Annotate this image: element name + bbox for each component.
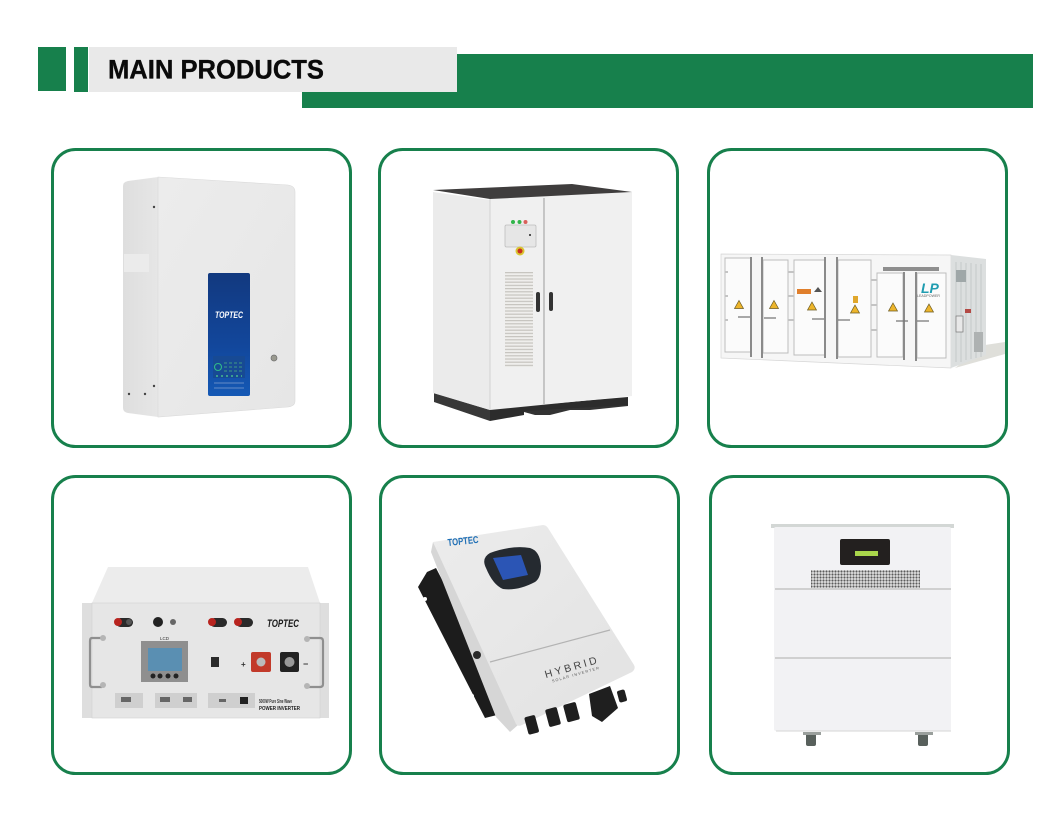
- panel: outdoor cabinet: [380, 150, 678, 446]
- screen: [484, 547, 541, 589]
- casters: [803, 732, 933, 746]
- header band: green: [302, 54, 1033, 108]
- card frame: [52, 476, 350, 774]
- logo: LP: [921, 280, 940, 296]
- logo: TOPTEC: [215, 310, 243, 321]
- LCD module: [141, 636, 188, 682]
- panel: hybrid inverter: [380, 476, 678, 774]
- control box: [505, 220, 536, 256]
- model label: SOLAR INVERTER: [551, 666, 601, 684]
- panel: wall-mounted battery: [52, 150, 350, 446]
- logo: LEADPOWER: [917, 294, 940, 298]
- battery display panel: [208, 273, 250, 396]
- card frame: [708, 150, 1006, 446]
- mounting bracket: [418, 568, 510, 718]
- logo: TOPTEC: [447, 535, 479, 549]
- header accent: narrow green bar: [74, 47, 88, 92]
- vent mesh: [811, 570, 920, 588]
- header banner: [38, 47, 1033, 108]
- header accent: large green square: [38, 47, 66, 91]
- LCD module: LCD: [160, 636, 170, 641]
- card frame: [52, 150, 350, 446]
- logo: TOPTEC: [267, 618, 300, 630]
- card frame: [380, 476, 678, 774]
- panel: container storage: [708, 150, 1006, 446]
- product: storage container: [721, 254, 1005, 368]
- door handles: [536, 292, 553, 312]
- product: rack power inverter: POWER INVERTER: [259, 706, 300, 712]
- product: stacked home battery: [771, 524, 954, 746]
- display: [840, 539, 890, 565]
- ventilation louver: [505, 272, 533, 367]
- product: hybrid solar inverter: [418, 525, 635, 735]
- warning triangles: [734, 300, 934, 313]
- product: energy storage cabinet: [433, 184, 632, 421]
- side knob: [473, 651, 481, 659]
- model label: HYBRID: [543, 654, 601, 681]
- header label: grey plate: [89, 47, 457, 92]
- title: MAIN PRODUCTS: [108, 54, 324, 84]
- panel: rack inverter: [52, 476, 350, 774]
- cable glands: [524, 686, 627, 735]
- DC terminals: [241, 652, 308, 672]
- power switch: [211, 657, 219, 667]
- card frame: [380, 150, 678, 446]
- model label: 5000W Pure Sine Wave: [259, 699, 292, 705]
- DC terminals: −: [303, 659, 308, 669]
- ports: [115, 693, 255, 708]
- card frame: [710, 476, 1008, 774]
- warning labels: [797, 289, 811, 294]
- DC terminals: +: [241, 660, 246, 669]
- product: wall battery: [123, 177, 295, 417]
- panel: stacked battery: [710, 476, 1008, 774]
- logo: [917, 280, 940, 298]
- product: rack power inverter: [82, 567, 329, 718]
- terminals: [114, 617, 253, 627]
